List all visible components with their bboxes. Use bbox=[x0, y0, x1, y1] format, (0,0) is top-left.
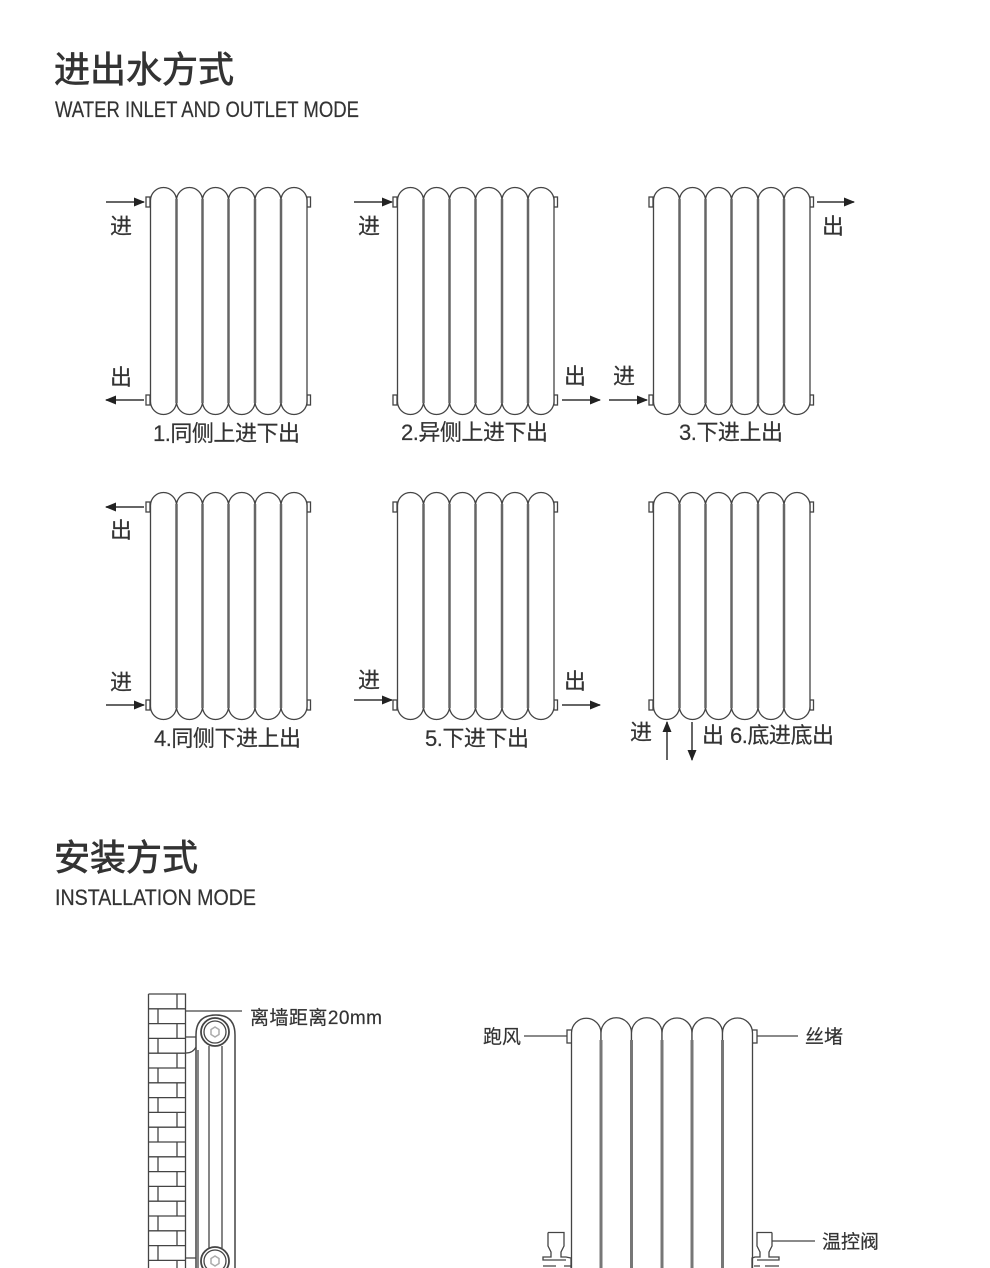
label: wall distance: 离墙距离20mm bbox=[250, 1007, 382, 1029]
diagram 6: bottom in, bottom out from underside: 进 bbox=[630, 720, 652, 745]
leader lines bbox=[524, 1036, 815, 1241]
diagram 1: same side top in, bottom out bbox=[106, 188, 310, 446]
leader line bbox=[186, 1010, 242, 1012]
diagram 3: bottom in, top out bbox=[609, 188, 854, 445]
diagram 5: bottom in, bottom out bbox=[354, 492, 600, 751]
title: installation mode bbox=[54, 837, 256, 910]
diagram 4: same side bottom in, top out bbox=[106, 492, 310, 751]
side view: wall clearance bbox=[148, 994, 242, 1268]
title: water inlet and outlet mode: WATER INLET AND OUTLET MODE bbox=[55, 97, 359, 122]
thermostatic valve left bbox=[543, 1232, 571, 1268]
diagram 2: opposite side top in, bottom out: 出 bbox=[564, 364, 586, 389]
diagram 1: same side top in, bottom out: 1.同侧上进下出 bbox=[153, 421, 300, 446]
title: water inlet and outlet mode bbox=[54, 49, 359, 122]
diagram 6: bottom in, bottom out from underside: 6.底进底出 bbox=[730, 723, 834, 748]
diagram 6: bottom in, bottom out from underside: 出 bbox=[702, 723, 724, 748]
diagram 3: bottom in, top out: 出 bbox=[822, 214, 844, 239]
diagram 1: same side top in, bottom out: 进 bbox=[110, 214, 132, 239]
diagram 2: opposite side top in, bottom out: 进 bbox=[358, 214, 380, 239]
label: thermostatic valve: 温控阀 bbox=[822, 1231, 879, 1253]
diagram 2: opposite side top in, bottom out bbox=[354, 188, 600, 445]
label: air vent: 跑风 bbox=[483, 1026, 521, 1048]
diagram 1: same side top in, bottom out: 出 bbox=[110, 365, 132, 390]
diagram 5: bottom in, bottom out: 5.下进下出 bbox=[425, 726, 529, 751]
diagram 5: bottom in, bottom out: 出 bbox=[564, 669, 586, 694]
diagram 4: same side bottom in, top out: 出 bbox=[110, 518, 132, 543]
label: plug: 丝堵 bbox=[805, 1026, 843, 1048]
radiator front bbox=[567, 1018, 757, 1268]
diagram 5: bottom in, bottom out: 进 bbox=[358, 668, 380, 693]
thermostatic valve right bbox=[752, 1232, 779, 1268]
radiator side profile bbox=[186, 1015, 235, 1268]
diagram 3: bottom in, top out: 进 bbox=[613, 364, 635, 389]
diagram 4: same side bottom in, top out: 进 bbox=[110, 670, 132, 695]
front view: radiator with valves bbox=[524, 1018, 815, 1268]
title: water inlet and outlet mode: 进出水方式 bbox=[54, 49, 234, 90]
diagram 4: same side bottom in, top out: 4.同侧下进上出 bbox=[154, 726, 301, 751]
diagram 6: bottom in, bottom out from underside bbox=[630, 492, 834, 760]
title: installation mode: 安装方式 bbox=[54, 837, 198, 878]
title: installation mode: INSTALLATION MODE bbox=[55, 885, 256, 910]
brick wall bbox=[148, 994, 186, 1268]
diagram 2: opposite side top in, bottom out: 2.异侧上进下出 bbox=[401, 420, 548, 445]
diagram 3: bottom in, top out: 3.下进上出 bbox=[679, 420, 783, 445]
